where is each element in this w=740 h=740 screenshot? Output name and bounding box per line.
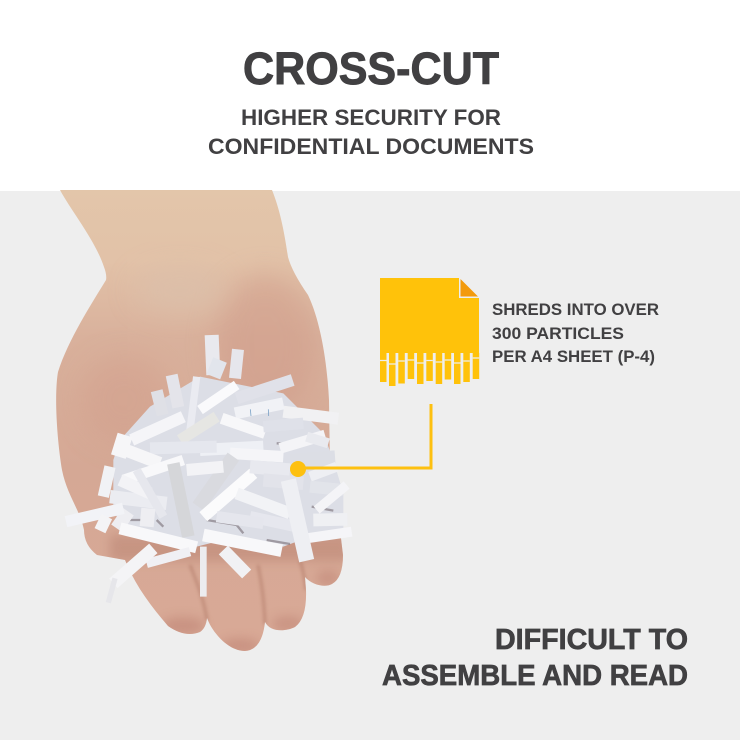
icon: shredded document (380, 278, 479, 386)
callout text: 300 PARTICLES (492, 325, 624, 343)
subtitle: CONFIDENTIAL DOCUMENTS (208, 134, 534, 159)
subtitle (208, 105, 534, 159)
bottom heading: ASSEMBLE AND READ (382, 660, 688, 692)
bottom heading (382, 624, 688, 692)
photo: hand holding shredded paper (50, 185, 352, 660)
paper strips (380, 353, 479, 386)
document body (380, 278, 479, 353)
grey panel (0, 191, 740, 740)
bottom heading: DIFFICULT TO (495, 624, 688, 656)
callout text (492, 301, 659, 366)
title: CROSS-CUT (243, 43, 499, 94)
shredded paper pile (66, 335, 352, 603)
connector dot (290, 461, 306, 477)
subtitle: HIGHER SECURITY FOR (241, 105, 501, 130)
hand (50, 185, 350, 660)
callout text: PER A4 SHEET (P-4) (492, 348, 655, 366)
folded corner (460, 279, 478, 296)
shred cut marks (380, 358, 479, 364)
connector line (298, 404, 431, 468)
callout text: SHREDS INTO OVER (492, 301, 659, 319)
